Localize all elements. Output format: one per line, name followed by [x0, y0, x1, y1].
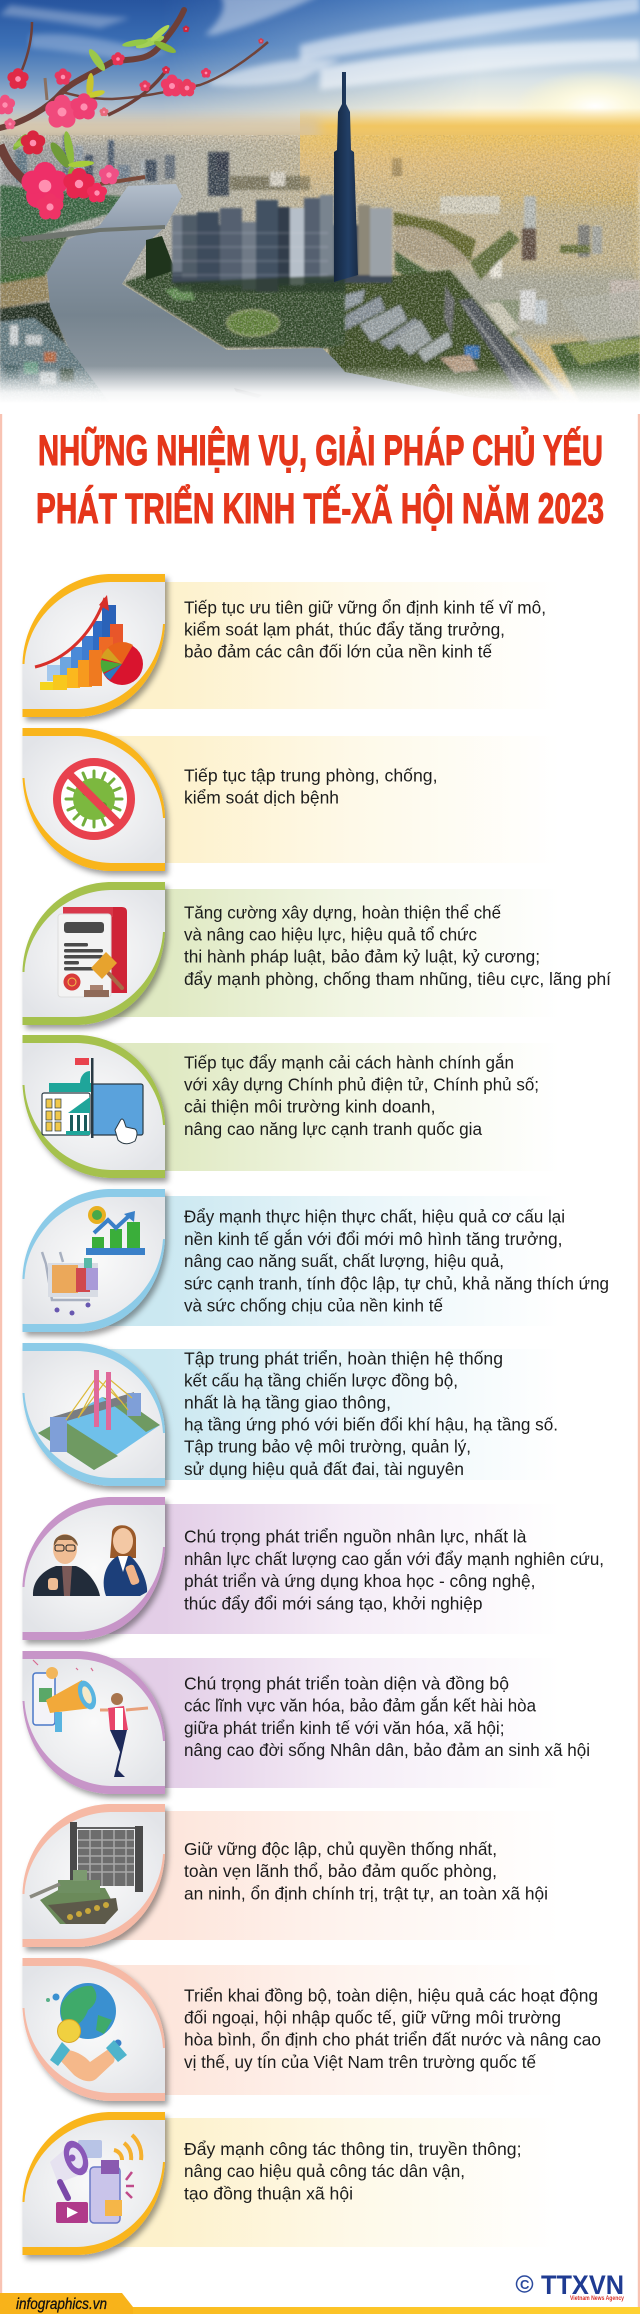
text block: nhân lực chất lượng cao gắn với đẩy mạnh nghiên cứu,	[184, 1548, 604, 1569]
boats	[234, 388, 244, 391]
text block: và nâng cao hiệu lực, hiệu quả tổ chức	[184, 925, 477, 945]
text block	[184, 1207, 609, 1316]
text block	[184, 1673, 590, 1760]
text block: đối ngoại, hội nhập quốc tế, giữ vững môi trường	[184, 2007, 561, 2027]
distant city	[0, 108, 640, 403]
riverside trees	[146, 236, 175, 280]
river	[47, 184, 466, 398]
panel: item 7	[22, 1497, 604, 1640]
title	[36, 426, 604, 533]
text block: nền kinh tế gắn với đổi mới mô hình tăng trưởng,	[184, 1228, 562, 1249]
text block	[184, 2139, 522, 2203]
panel: item 9	[22, 1804, 560, 1947]
panel: item 8	[22, 1651, 590, 1794]
text block: hòa bình, ổn định cho phát triển đất nước và nâng cao	[184, 2030, 601, 2050]
text block: nâng cao năng suất, chất lượng, hiệu quả,	[184, 1251, 504, 1271]
icon: growth bars and shopping cart	[42, 1206, 145, 1316]
icon: legal document with gavel	[58, 907, 127, 997]
sky	[0, 0, 640, 160]
logo: TTXVN: Vietnam News Agency	[570, 2296, 625, 2302]
panel: item 1	[22, 574, 560, 717]
text block: hạ tầng ứng phó với biến đổi khí hậu, hạ tầng số.	[184, 1415, 558, 1435]
panel: item 3	[22, 882, 611, 1025]
text block: phát triển và ứng dụng khoa học - công nghệ,	[184, 1571, 536, 1591]
footer bar	[0, 2293, 640, 2314]
text block: bảo đảm các cân đối lớn của nền kinh tế	[184, 641, 492, 661]
text block	[184, 1527, 604, 1613]
icon: virus prohibited	[57, 762, 131, 836]
white fade	[0, 366, 640, 404]
text block	[184, 1839, 548, 1903]
text block: cải thiện môi trường kinh doanh,	[184, 1097, 436, 1117]
text block: với xây dựng Chính phủ điện tử, Chính phủ số;	[184, 1075, 539, 1095]
text block: nhất là hạ tầng giao thông,	[184, 1392, 391, 1412]
icon: e-government building and tablet	[42, 1058, 143, 1144]
text block: Triển khai đồng bộ, toàn diện, hiệu quả các hoạt động	[184, 1985, 598, 2005]
text block: đẩy mạnh phòng, chống tham nhũng, tiêu cực, lãng phí	[184, 969, 611, 989]
text block: toàn vẹn lãnh thổ, bảo đảm quốc phòng,	[184, 1861, 497, 1881]
text block: Tiếp tục tập trung phòng, chống,	[184, 766, 438, 786]
upper left land	[0, 185, 127, 240]
text block: tạo đồng thuận xã hội	[184, 2183, 353, 2203]
Landmark 81 tower	[334, 72, 358, 282]
peach blossom branch	[0, 10, 268, 219]
text block: Tăng cường xây dựng, hoàn thiện thể chế	[184, 902, 501, 922]
icon: media megaphone and phone	[50, 2135, 141, 2223]
text block: giữa phát triển kinh tế với văn hóa, xã hội;	[184, 1718, 504, 1738]
text block	[184, 1348, 558, 1479]
logo: TTXVN: C	[520, 2277, 530, 2292]
page side border right	[638, 414, 640, 2314]
icon: megaphone and person	[33, 1660, 148, 1777]
icon: globe, coin and handshake	[46, 1983, 127, 2081]
text block	[184, 902, 611, 989]
lower right land	[320, 270, 640, 403]
icon: cable-stayed bridge	[38, 1370, 160, 1470]
panel: item 5	[22, 1189, 609, 1332]
text block: nâng cao đời sống Nhân dân, bảo đảm an sinh xã hội	[184, 1740, 590, 1760]
text block: Chú trọng phát triển toàn diện và đồng bộ	[184, 1673, 509, 1693]
text block: thi hành pháp luật, bảo đảm kỷ luật, kỷ cương;	[184, 947, 540, 967]
left bank	[0, 231, 101, 392]
text block: Đẩy mạnh thực hiện thực chất, hiệu quả cơ cấu lại	[184, 1207, 565, 1227]
text block	[184, 597, 546, 661]
panel: item 6	[22, 1343, 560, 1486]
text block: an ninh, ổn định chính trị, trật tự, an toàn xã hội	[184, 1883, 548, 1903]
text block: nâng cao năng lực cạnh tranh quốc gia	[184, 1119, 482, 1139]
text block: Tiếp tục đẩy mạnh cải cách hành chính gắn	[184, 1051, 514, 1072]
text block	[184, 1985, 601, 2072]
text block: kiểm soát lạm phát, thúc đẩy tăng trưởng,	[184, 619, 505, 639]
page side border left	[0, 414, 2, 2314]
text block: vị thế, uy tín của Việt Nam trên trường quốc tế	[184, 2052, 536, 2072]
text block: Tập trung bảo vệ môi trường, quản lý,	[184, 1437, 471, 1457]
icon: growth chart and pie	[35, 595, 143, 690]
skyline buildings left	[15, 135, 310, 196]
text block: Tập trung phát triển, hoàn thiện hệ thống	[184, 1348, 503, 1368]
text block: sức cạnh tranh, tính độc lập, tự chủ, khả năng thích ứng	[184, 1273, 609, 1293]
text block: kiểm soát dịch bệnh	[184, 788, 339, 808]
footer source text: infographics.vn	[16, 2296, 107, 2313]
text block	[184, 1051, 539, 1139]
logo: TTXVN	[516, 2270, 625, 2302]
text block: Chú trọng phát triển nguồn nhân lực, nhất là	[184, 1527, 527, 1547]
text block: Đẩy mạnh công tác thông tin, truyền thông;	[184, 2139, 522, 2159]
text block: các lĩnh vực văn hóa, bảo đảm gắn kết hài hòa	[184, 1695, 536, 1716]
logo: TTXVN: TTXVN	[541, 2270, 624, 2300]
text block	[184, 766, 438, 808]
icon: two professionals	[33, 1525, 147, 1596]
text block: thúc đẩy đổi mới sáng tạo, khởi nghiệp	[184, 1593, 482, 1613]
panel: item 10	[22, 1958, 601, 2101]
text block: và sức chống chịu của nền kinh tế	[184, 1296, 443, 1316]
text block: sử dụng hiệu quả đất đai, tài nguyên	[184, 1459, 464, 1479]
text block: nâng cao hiệu quả công tác dân vận,	[184, 2161, 465, 2181]
text block: Tiếp tục ưu tiên giữ vững ổn định kinh tế vĩ mô,	[184, 597, 546, 617]
text block: kết cấu hạ tầng chiến lược đồng bộ,	[184, 1370, 458, 1390]
panel: item 2	[22, 728, 560, 871]
text block: Giữ vững độc lập, chủ quyền thống nhất,	[184, 1839, 497, 1859]
city texture	[0, 125, 640, 403]
panel: hero city photo	[0, 0, 640, 404]
panel: item 11	[22, 2112, 560, 2255]
icon: fence and tank	[30, 1822, 143, 1924]
residential towers	[172, 195, 392, 292]
bridge	[20, 225, 165, 242]
panel: item 4	[22, 1035, 560, 1178]
highway	[442, 286, 566, 393]
right city landmarks	[392, 158, 640, 324]
peninsula park	[121, 262, 345, 352]
